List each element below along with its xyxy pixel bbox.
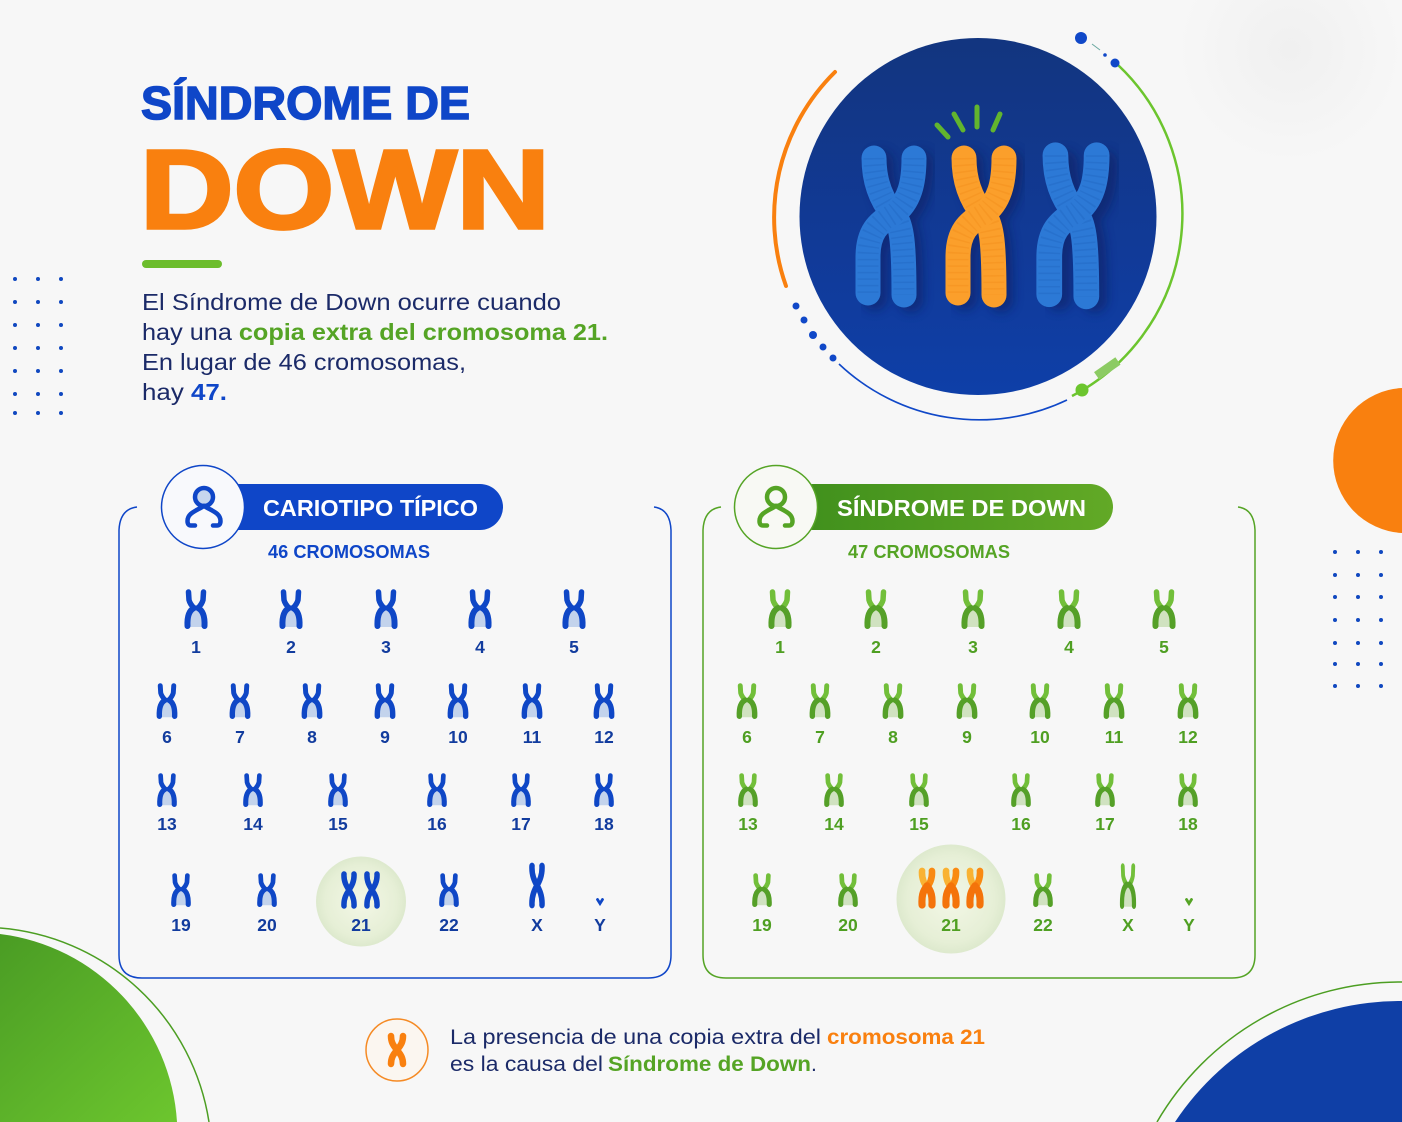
chromosome 22 <box>439 876 459 935</box>
chromosome 7 <box>232 686 248 747</box>
chromosome 11: 11 <box>1105 727 1124 747</box>
big chromosome: left blue <box>868 158 921 300</box>
dot grid: right <box>1333 550 1383 688</box>
chromosome 14 <box>824 776 844 834</box>
chromosome 6 <box>159 686 175 747</box>
footer text <box>450 1026 985 1076</box>
chromosome 1: 1 <box>191 637 201 657</box>
chromosome 11 <box>523 686 542 747</box>
panel: cariotipo típico <box>119 466 671 978</box>
decorative circle: blue bottom-right <box>1157 982 1402 1122</box>
highlighted trisomy 21 <box>896 844 1006 954</box>
footer text: La presencia de una copia extra del <box>450 1026 821 1049</box>
chromosome Y <box>594 900 606 935</box>
chromosome 9: 9 <box>962 727 972 747</box>
chromosome 13 <box>157 776 177 834</box>
highlighted pair 21: 21 <box>351 915 371 935</box>
chromosome 13: 13 <box>157 814 177 834</box>
chromosome 4 <box>1060 592 1078 657</box>
chromosome 5: 5 <box>1159 637 1169 657</box>
chromosome 16: 16 <box>1011 814 1031 834</box>
chromosome 10 <box>448 686 468 747</box>
dots: blue lower left <box>792 302 836 362</box>
chromosome 10 <box>1030 686 1050 747</box>
intro text: En lugar de 46 cromosomas, <box>142 349 466 375</box>
chromosome 8: 8 <box>888 727 898 747</box>
header pill: CARIOTIPO TÍPICO <box>263 494 478 521</box>
icon: person blue <box>162 466 244 548</box>
chromosome 12: 12 <box>594 727 614 747</box>
chromosome 5 <box>565 592 583 657</box>
highlighted pair 21 <box>316 856 406 946</box>
chromosome 3 <box>377 592 395 657</box>
chromosome 19 <box>171 876 191 935</box>
title: SÍNDROME DE <box>141 77 470 129</box>
footer note <box>366 1019 985 1081</box>
chromosome 11 <box>1105 686 1124 747</box>
hero disc <box>800 38 1156 395</box>
chromosome 10: 10 <box>448 727 468 747</box>
big chromosome: right blue <box>1049 155 1105 300</box>
chromosome 20: 20 <box>838 915 858 935</box>
chromosome 6: 6 <box>162 727 172 747</box>
green spark marks <box>937 107 1000 137</box>
panel outline <box>703 507 1255 978</box>
title <box>140 77 550 252</box>
big chromosome: centre orange <box>958 158 1011 300</box>
chromosome 4 <box>471 592 489 657</box>
chromosome 14: 14 <box>824 814 844 834</box>
chromosome 19: 19 <box>171 915 191 935</box>
hero illustration: chromosomes in circle <box>774 32 1182 420</box>
highlighted trisomy 21: 21 <box>941 915 961 935</box>
chromosome Y <box>1183 900 1195 935</box>
dots: blue upper right <box>1075 32 1120 68</box>
chromosome 9: 9 <box>380 727 390 747</box>
chromosome 18 <box>594 776 614 834</box>
chromosome 20: 20 <box>257 915 277 935</box>
chromosome X <box>531 866 543 935</box>
chromosome 14 <box>243 776 263 834</box>
header pill <box>200 484 503 530</box>
chromosome 2: 2 <box>871 637 881 657</box>
footer text: . <box>811 1053 817 1076</box>
header pill: SÍNDROME DE DOWN <box>837 494 1086 521</box>
chromosome 10: 10 <box>1030 727 1050 747</box>
chromosome 2 <box>867 592 885 657</box>
footer text: cromosoma 21 <box>827 1026 985 1049</box>
chromosome 6 <box>739 686 755 747</box>
chromosome 17: 17 <box>511 814 531 834</box>
chromosome 22 <box>1033 876 1053 935</box>
chromosome 7: 7 <box>815 727 825 747</box>
chromosome 3: 3 <box>381 637 391 657</box>
chromosome 1: 1 <box>775 637 785 657</box>
chromosome 17: 17 <box>1095 814 1115 834</box>
chromosome X <box>1122 866 1134 935</box>
chromosome 11: 11 <box>523 727 542 747</box>
icon: orange chromosome <box>366 1019 428 1081</box>
chromosome 7 <box>812 686 828 747</box>
panel outline <box>119 507 671 978</box>
chromosome 20 <box>838 876 858 935</box>
chromosome X: X <box>531 915 543 935</box>
dot grid: left <box>13 277 63 415</box>
chromosome 18 <box>1178 776 1198 834</box>
chromosome 17 <box>511 776 531 834</box>
chromosome 13: 13 <box>738 814 758 834</box>
chromosome 16 <box>1011 776 1031 834</box>
chromosome 5 <box>1155 592 1173 657</box>
chromosome 17 <box>1095 776 1115 834</box>
chromosome 8 <box>304 686 320 747</box>
chromosome 8 <box>885 686 901 747</box>
icon: person green <box>734 466 818 548</box>
chromosome 1 <box>771 592 789 657</box>
chromosome X: X <box>1122 915 1134 935</box>
chromosome 20 <box>257 876 277 935</box>
chromosome 22: 22 <box>1033 915 1053 935</box>
intro text: hay 47. <box>142 379 227 405</box>
chromosome 8: 8 <box>307 727 317 747</box>
chromosome 9 <box>959 686 975 747</box>
chromosome 2: 2 <box>286 637 296 657</box>
chromosome 14: 14 <box>243 814 263 834</box>
chromosome 15 <box>328 776 348 834</box>
chromosome 18: 18 <box>594 814 614 834</box>
chromosome Y: Y <box>594 915 606 935</box>
subtitle: 46 CROMOSOMAS <box>268 542 430 562</box>
panel: síndrome de down <box>703 466 1255 978</box>
header pill <box>790 484 1113 530</box>
chromosome 19: 19 <box>752 915 772 935</box>
ring: orange arc <box>774 72 835 286</box>
chromosome 18: 18 <box>1178 814 1198 834</box>
decorative circle: green bottom-left <box>0 928 209 1122</box>
chromosome 16: 16 <box>427 814 447 834</box>
chromosome 15: 15 <box>909 814 929 834</box>
ring: green arc <box>1072 65 1182 396</box>
chromosome 6: 6 <box>742 727 752 747</box>
chromosome 1 <box>187 592 205 657</box>
title: DOWN <box>140 127 550 252</box>
chromosome 5: 5 <box>569 637 579 657</box>
chromosome 7: 7 <box>235 727 245 747</box>
chromosome Y: Y <box>1183 915 1195 935</box>
intro text: hay una copia extra del cromosoma 21. <box>142 319 608 345</box>
chromosome 15 <box>909 776 929 834</box>
subtitle: 47 CROMOSOMAS <box>848 542 1010 562</box>
chromosome 16 <box>427 776 447 834</box>
chromosome 12: 12 <box>1178 727 1198 747</box>
chromosome 4: 4 <box>475 637 485 657</box>
chromosome 19 <box>752 876 772 935</box>
chromosome 4: 4 <box>1064 637 1074 657</box>
chromosome 13 <box>738 776 758 834</box>
ring: blue arc <box>839 364 1067 420</box>
footer text: es la causa del <box>450 1053 603 1076</box>
chromosome 12 <box>1178 686 1198 747</box>
footer text: Síndrome de Down <box>608 1053 811 1076</box>
decorative circle: orange right <box>1333 388 1402 533</box>
chromosome 3: 3 <box>968 637 978 657</box>
chromosome 15: 15 <box>328 814 348 834</box>
chromosome 3 <box>964 592 982 657</box>
chromosome 2 <box>282 592 300 657</box>
title underline <box>142 260 222 268</box>
intro text: El Síndrome de Down ocurre cuando <box>142 289 561 315</box>
chromosome 22: 22 <box>439 915 459 935</box>
chromosome 9 <box>377 686 393 747</box>
chromosome 12 <box>594 686 614 747</box>
intro text <box>142 289 608 405</box>
